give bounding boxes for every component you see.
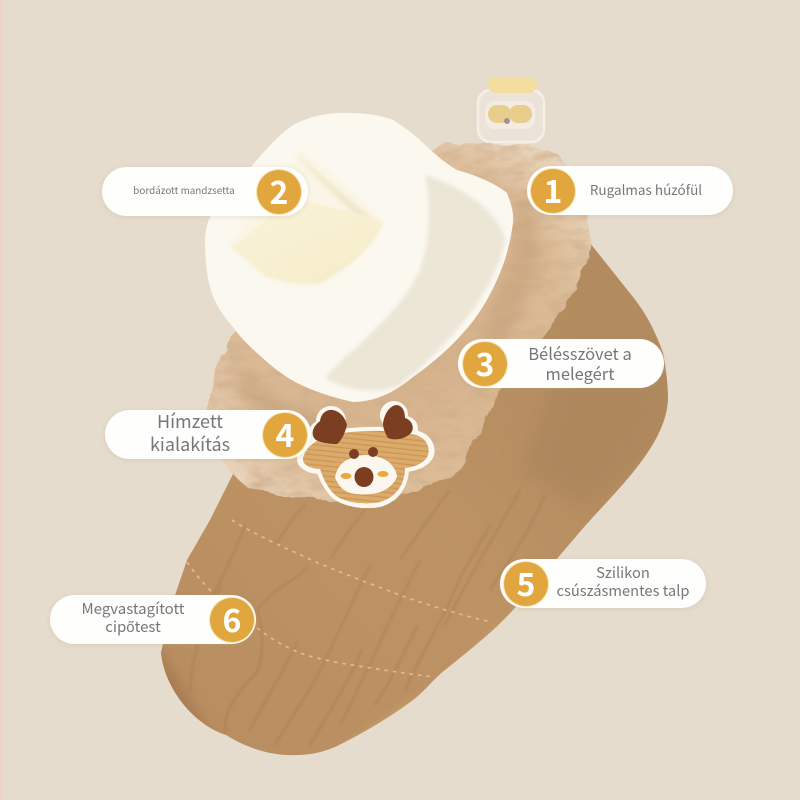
left edge tint [0, 0, 2, 800]
label 4 text [150, 408, 230, 456]
label 3 text: melegért [546, 360, 614, 384]
label 3 text: Bélésszövet a [528, 340, 632, 364]
label 6 text [82, 598, 184, 637]
label 5 text: csúszásmentes talp [557, 580, 689, 601]
number badge 2 [257, 170, 301, 214]
callout 6: thickened shoe body [50, 595, 256, 644]
label 4 text: Hímzett [157, 408, 223, 434]
ribbed outer wall [325, 175, 505, 390]
number badge 3 [463, 342, 507, 386]
callout 1: elastic pull tab [527, 166, 733, 215]
number badge 5: 5 [517, 560, 535, 606]
number badge 6 [210, 598, 254, 642]
fur lining [206, 143, 590, 502]
label 5 text [557, 562, 689, 601]
callout 5: silicone non-slip sole [500, 559, 706, 608]
callout 4: embroidered design [105, 410, 311, 459]
number badge 6: 6 [223, 596, 241, 642]
callout 3: warm lining [458, 339, 664, 388]
fabric pleats [398, 535, 496, 648]
label 6 text: cipőtest [105, 616, 161, 637]
number badge 5 [504, 562, 548, 606]
embroidered deer patch [301, 405, 431, 504]
cream interior wall [232, 155, 380, 245]
number badge 3: 3 [476, 340, 494, 386]
callout 2: ribbed cuff [102, 167, 308, 216]
label 6 text: Megvastagított [82, 598, 184, 619]
label 2 text: bordázott mandzsetta [133, 183, 235, 197]
number badge 4 [263, 412, 307, 456]
number badge 1: 1 [544, 166, 562, 212]
number badge 4: 4 [276, 410, 294, 456]
number badge 1 [531, 168, 575, 212]
label 1 text: Rugalmas húzófül [590, 179, 702, 199]
yellow knit lining [232, 197, 383, 284]
number badge 2: 2 [270, 168, 288, 214]
fur shading [237, 190, 538, 450]
ribbed knit cuff [200, 105, 520, 410]
label 4 text: kialakítás [150, 430, 230, 456]
shoe body [150, 243, 668, 760]
label 3 text [528, 340, 632, 384]
stitching lines [187, 520, 491, 677]
pull tab toggle [478, 77, 544, 172]
label 5 text: Szilikon [596, 562, 650, 583]
